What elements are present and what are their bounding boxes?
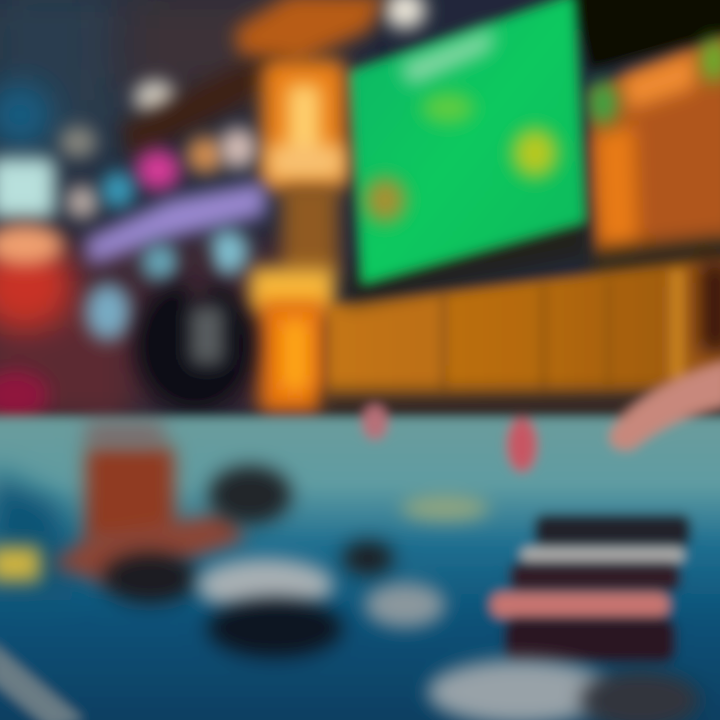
green screen [350,0,585,284]
orange panels [589,35,720,278]
small red markers [362,404,537,472]
dark figure [135,245,255,411]
table [0,418,720,720]
red chip stack [50,422,245,585]
dark chip stacks [102,465,445,658]
ceiling lights [60,0,425,218]
dark top right [570,0,720,70]
wood wall [320,258,720,420]
background: upper venue [0,0,720,430]
orange roof [120,0,385,160]
orange pillar [250,60,346,412]
colourful lights left [0,128,265,419]
screen shadow [345,208,590,305]
hand [609,360,720,450]
right chip stack [428,515,700,720]
